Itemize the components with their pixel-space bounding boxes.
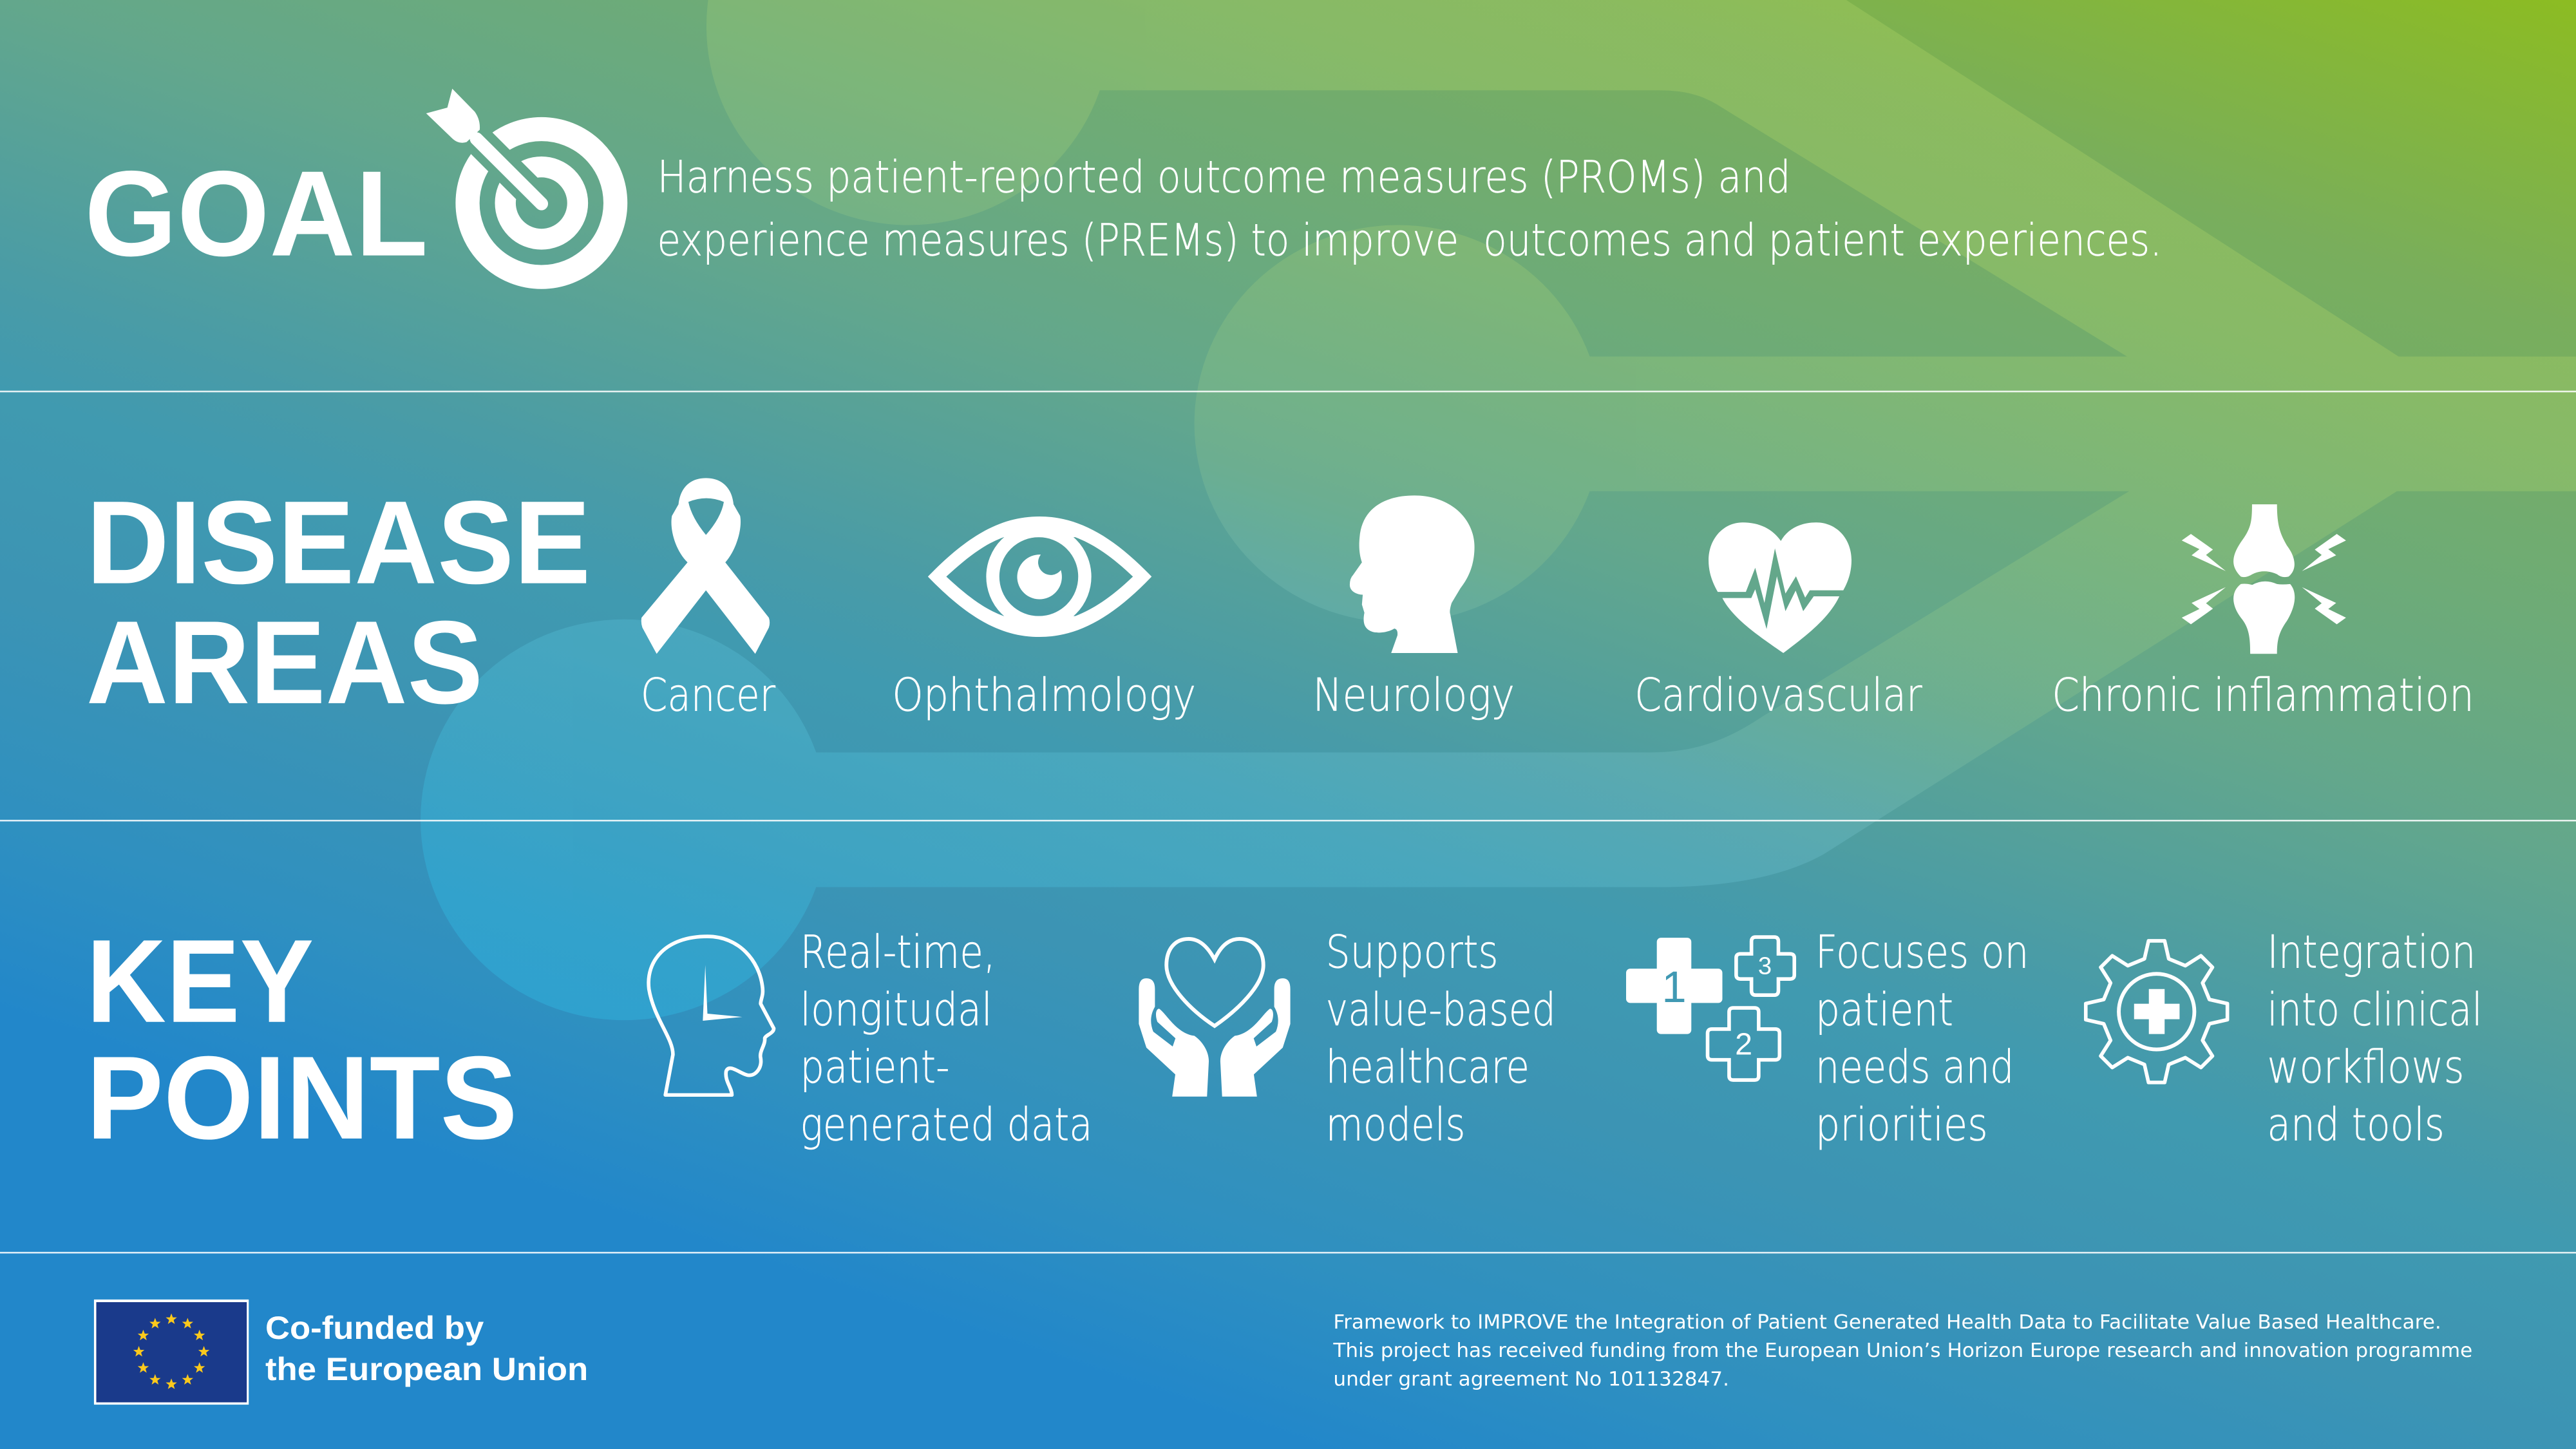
icon: numbered medical crosses <box>1630 937 1794 1080</box>
text: value-based models: Supports <box>1326 926 1499 979</box>
heading: key points: KEY <box>86 915 314 1047</box>
text: workflow integration: Integration <box>2267 926 2476 979</box>
text: value-based models: models <box>1326 1098 1466 1151</box>
icon: eye <box>928 516 1151 637</box>
heading: key points <box>86 915 518 1164</box>
icon: numbered medical crosses: 2 <box>1735 1027 1752 1062</box>
text: funding notice: Framework to IMPROVE the Integration of Patient Generated Health Data to Facilitate Value Based Healthcare. <box>1333 1311 2441 1334</box>
text: real-time data: longitudal <box>800 983 992 1036</box>
icon: head silhouette <box>1350 495 1475 653</box>
text: real-time data: generated data <box>800 1098 1092 1151</box>
goal statement <box>657 151 2162 267</box>
icon: numbered medical crosses: 3 <box>1758 952 1772 980</box>
text: funding notice <box>1332 1311 2472 1391</box>
text: real-time data: patient- <box>800 1041 949 1094</box>
text: workflow integration <box>2267 926 2483 1151</box>
heading: disease areas: DISEASE <box>86 477 591 609</box>
panel: key points <box>86 915 2483 1164</box>
label: ophthalmology: Ophthalmology <box>892 668 1196 721</box>
text: patient priorities: priorities <box>1815 1098 1988 1151</box>
icon: target with arrow <box>426 89 616 277</box>
panel: goal <box>84 89 2162 282</box>
text: workflow integration: workflows <box>2267 1041 2465 1094</box>
text: value-based models: value-based <box>1326 983 1556 1036</box>
goal statement: experience measures (PREMs) to improve outcomes and patient experiences. <box>657 215 2162 267</box>
text: real-time data: Real-time, <box>800 926 996 979</box>
icon: EU flag <box>94 1300 249 1405</box>
panel: footer <box>94 1300 2472 1405</box>
icon: inflamed joint <box>2182 504 2346 654</box>
text: value-based models <box>1326 926 1556 1151</box>
panel: disease areas <box>86 477 2474 728</box>
text: patient priorities: needs and <box>1815 1041 2014 1094</box>
label: neurology: Neurology <box>1312 668 1515 721</box>
goal statement: Harness patient-reported outcome measures (PROMs) and <box>657 151 1791 203</box>
text: workflow integration: and tools <box>2267 1098 2445 1151</box>
icon: gear with cross <box>2086 941 2228 1083</box>
text: patient priorities: patient <box>1815 983 1953 1036</box>
icon: cancer ribbon <box>641 478 770 654</box>
icon: numbered medical crosses: 1 <box>1662 962 1687 1012</box>
icon: hands holding heart <box>1139 939 1291 1097</box>
text: real-time data <box>800 926 1092 1151</box>
text: patient priorities <box>1815 926 2029 1151</box>
text: co-funded by the European Union <box>265 1310 588 1387</box>
text: value-based models: healthcare <box>1326 1041 1530 1094</box>
heading: goal: GOAL <box>84 146 428 282</box>
text: funding notice: This project has received funding from the European Union’s Horizon Europe research and innovation programme <box>1332 1340 2472 1362</box>
text: co-funded by the European Union: Co-funded by <box>265 1310 484 1346</box>
label: cardiovascular: Cardiovascular <box>1634 668 1922 721</box>
heading: disease areas <box>86 477 591 728</box>
label: chronic inflammation: Chronic inflammation <box>2052 668 2474 721</box>
text: workflow integration: into clinical <box>2267 983 2483 1036</box>
text: co-funded by the European Union: the European Union <box>265 1351 588 1387</box>
text: patient priorities: Focuses on <box>1815 926 2029 979</box>
heading: disease areas: AREAS <box>86 596 483 728</box>
heading: key points: POINTS <box>86 1032 518 1164</box>
text: funding notice: under grant agreement No 101132847. <box>1333 1368 1729 1391</box>
section dividers <box>0 391 2576 1253</box>
label: cancer: Cancer <box>641 668 775 721</box>
icon: head with clock <box>649 936 774 1095</box>
background connector shapes <box>421 0 2576 1020</box>
icon: heart with pulse <box>1709 522 1852 653</box>
